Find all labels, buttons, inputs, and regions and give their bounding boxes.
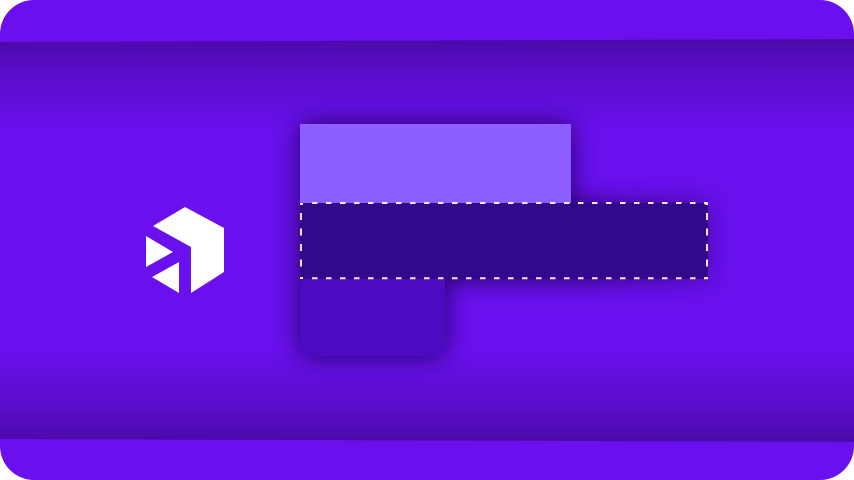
shadows of stacked bars: [300, 124, 708, 356]
logo icon: [146, 207, 224, 293]
bar: dark highlighted middle: [300, 203, 708, 279]
top shaded band: [0, 39, 854, 118]
bar: light top: [300, 124, 571, 203]
bottom shaded band: [0, 363, 854, 442]
dashed selection outline: [300, 203, 708, 278]
bar: medium bottom: [300, 279, 445, 356]
